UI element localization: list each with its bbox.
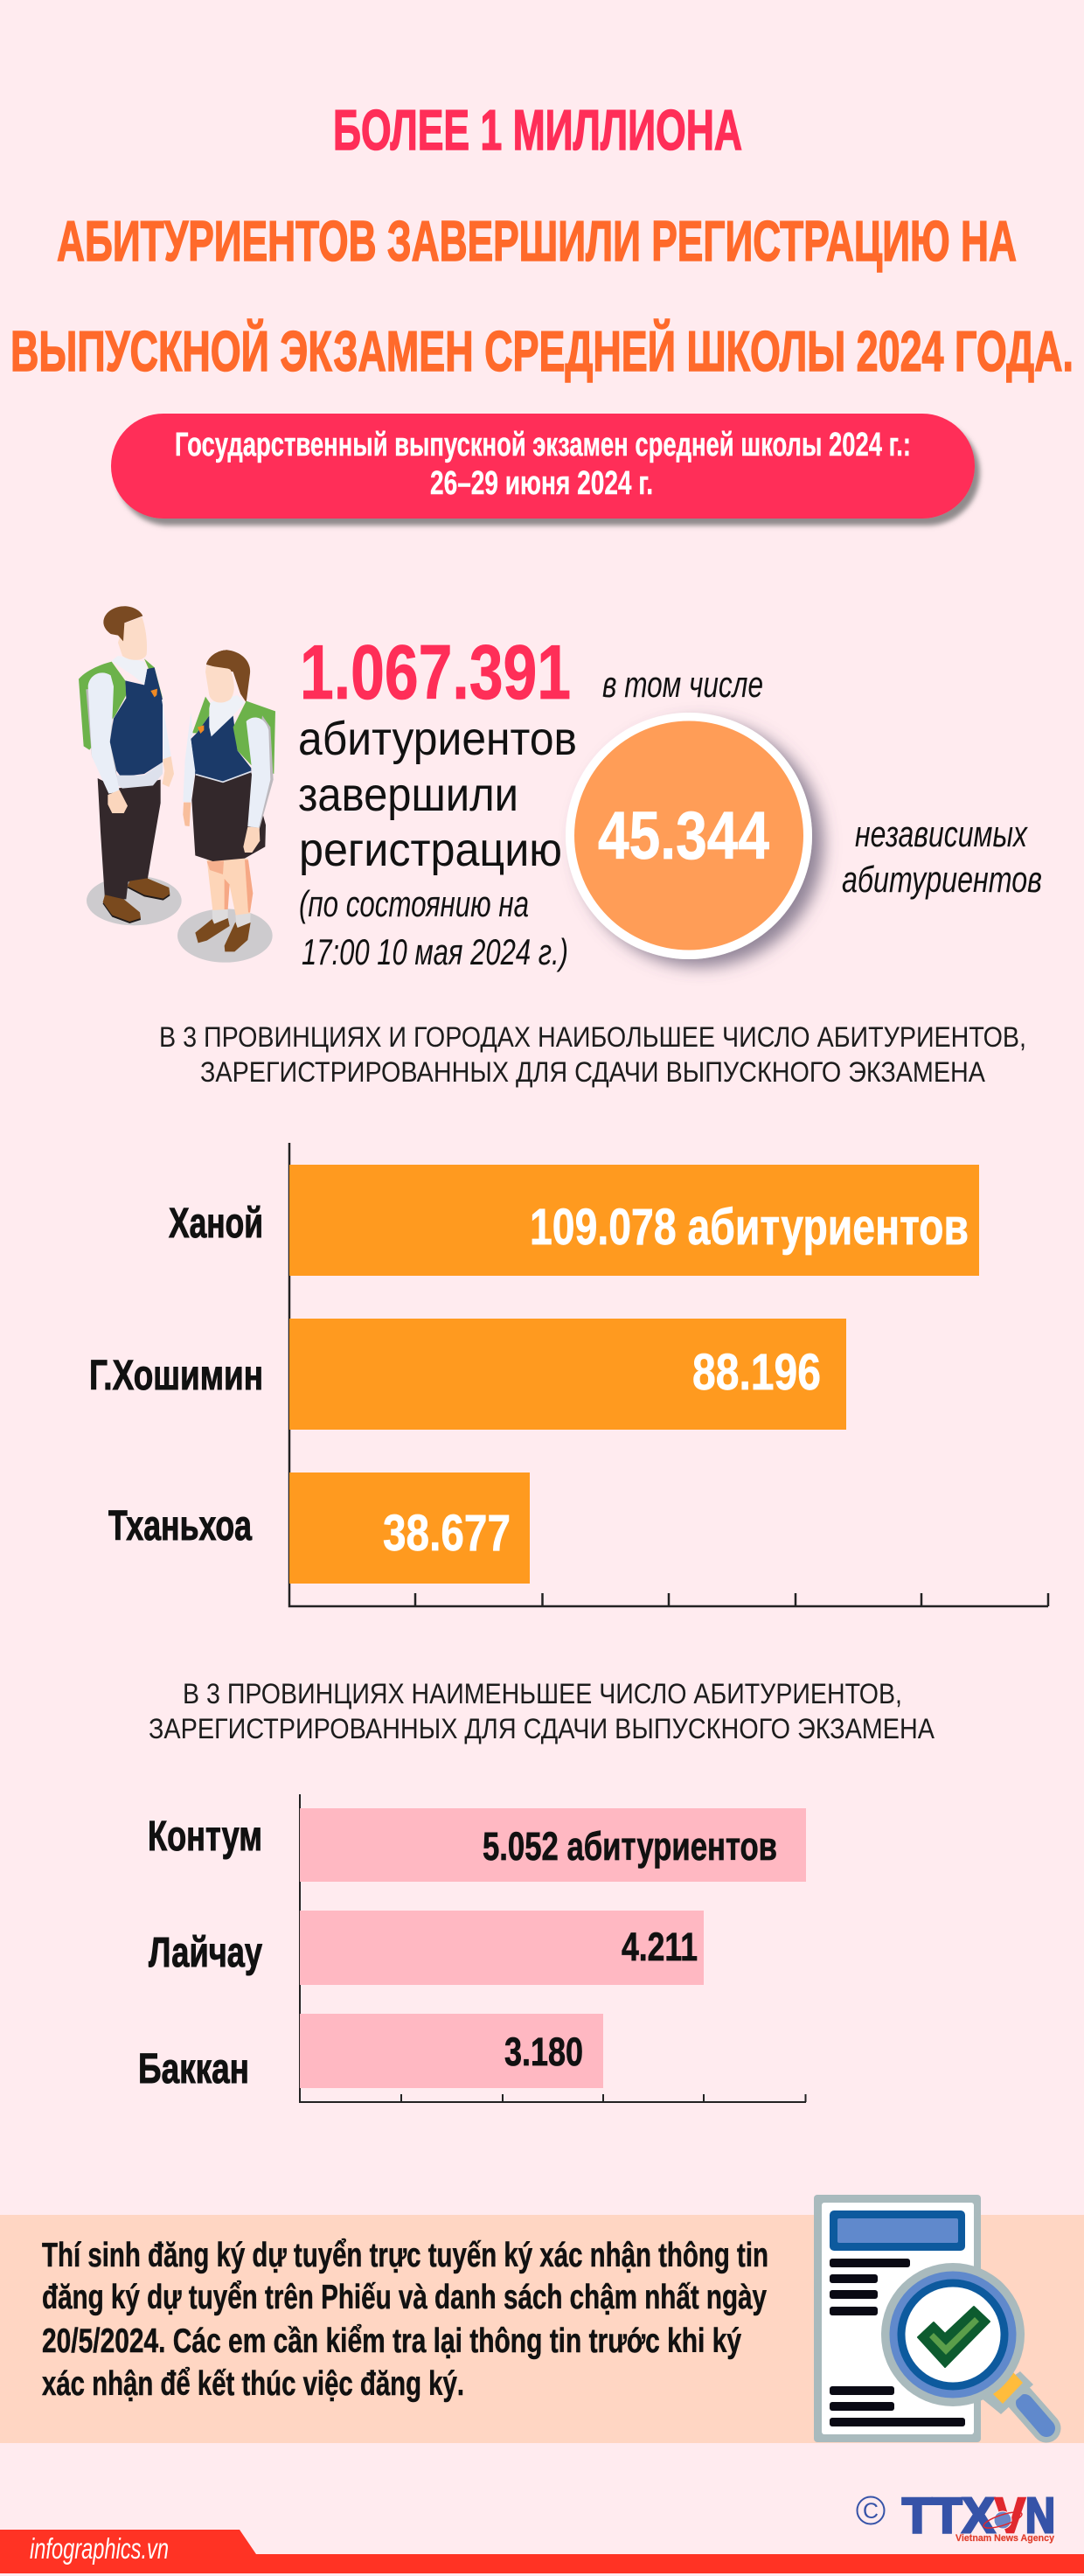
independent candidates label: независимых (855, 813, 1029, 854)
bar chart: bottom 3 provinces (138, 1794, 806, 2102)
main count text: завершили (298, 769, 518, 821)
heading: top 3 provinces: ЗАРЕГИСТРИРОВАННЫХ ДЛЯ СДАЧИ ВЫПУСКНОГО ЭКЗАМЕНА (200, 1056, 986, 1088)
independent candidates circle (566, 713, 812, 959)
note band: 20/5/2024. Các em cần kiểm tra lại thông tin trước khi ký (42, 2322, 741, 2360)
exam date pill: 26–29 июня 2024 г. (430, 465, 653, 502)
logo: TTXVN: N (1025, 2488, 1055, 2544)
logo: TTXVN: V (995, 2488, 1025, 2544)
icon: girl student (177, 650, 275, 963)
main count text (298, 629, 577, 972)
bar chart: bottom 3 provinces: 5.052 абитуриентов (483, 1824, 777, 1869)
note band: Thí sinh đăng ký dự tuyển trực tuyến ký xác nhận thông tin (42, 2237, 768, 2274)
title (10, 98, 1074, 383)
bar chart: bottom 3 provinces: Баккан (138, 2046, 249, 2092)
logo: TTXVN (857, 2488, 1055, 2544)
footer bar: infographics.vn (30, 2532, 169, 2565)
bar chart: bottom 3 provinces: Контум (148, 1814, 262, 1860)
independent candidates label (842, 813, 1042, 900)
heading: bottom 3 provinces: ЗАРЕГИСТРИРОВАННЫХ ДЛЯ СДАЧИ ВЫПУСКНОГО ЭКЗАМЕНА (149, 1713, 935, 1744)
note band (0, 2215, 1084, 2443)
bar chart: top 3 provinces: Ханой (169, 1201, 263, 1247)
bar chart: top 3 provinces: 38.677 (383, 1505, 511, 1562)
main count text: (по состоянию на (299, 883, 529, 924)
icon: document with magnifier (814, 2195, 1046, 2442)
logo: TTXVN: Vietnam News Agency (955, 2533, 1055, 2544)
bar chart: top 3 provinces: 88.196 (692, 1344, 821, 1401)
note band: đăng ký dự tuyển trên Phiếu và danh sách chậm nhất ngày (42, 2279, 767, 2316)
bar chart: bottom 3 provinces: 3.180 (504, 2029, 583, 2074)
exam date pill (111, 414, 975, 519)
main count text: абитуриентов (298, 713, 577, 765)
logo: TTXVN: C (863, 2499, 879, 2524)
title: БОЛЕЕ 1 МИЛЛИОНА (333, 98, 742, 162)
note band: xác nhận để kết thúc việc đăng ký. (42, 2365, 464, 2403)
logo: TTXVN: TTX (902, 2488, 995, 2544)
bar chart: bottom 3 provinces: 4.211 (622, 1925, 698, 1969)
icon: boy student (79, 606, 182, 925)
heading: top 3 provinces (159, 1021, 1026, 1088)
main count text: 17:00 10 мая 2024 г.) (302, 931, 568, 972)
independent candidates circle: 45.344 (598, 798, 769, 874)
bar chart: bottom 3 provinces: Лайчау (149, 1930, 262, 1976)
bar chart: top 3 provinces (89, 1143, 1048, 1606)
footer bar (0, 2530, 1084, 2573)
main count text: регистрацию (299, 824, 562, 876)
bar chart: top 3 provinces: 109.078 абитуриентов (530, 1199, 969, 1256)
including label: в том числе (602, 664, 763, 705)
heading: bottom 3 provinces: В 3 ПРОВИНЦИЯХ НАИМЕНЬШЕЕ ЧИСЛО АБИТУРИЕНТОВ, (183, 1678, 902, 1709)
bar chart: top 3 provinces: Г.Хошимин (89, 1353, 263, 1399)
main count text: 1.067.391 (300, 629, 571, 715)
icon: two students (79, 606, 275, 963)
bar chart: top 3 provinces: Тханьхоа (108, 1503, 252, 1549)
heading: bottom 3 provinces (149, 1678, 935, 1744)
